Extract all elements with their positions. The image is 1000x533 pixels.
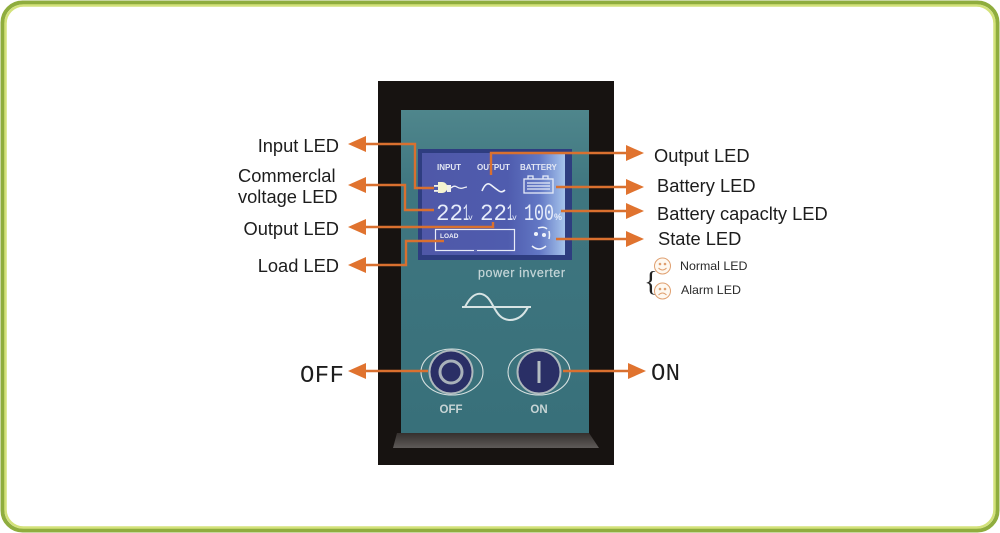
arrow: load LED [348, 241, 444, 273]
label: commercial voltage LED [238, 165, 338, 207]
label: state LED: State LED [658, 228, 741, 249]
OFF button [421, 349, 483, 416]
arrow: commercial voltage LED [348, 177, 434, 210]
icon: plug [434, 182, 467, 193]
arrow: OFF [348, 363, 428, 379]
bottom ledge [393, 433, 599, 448]
icon: sine wave logo [462, 294, 531, 320]
LCD display: v [468, 214, 473, 223]
LCD display [418, 149, 572, 260]
icon: battery [524, 176, 553, 193]
voltage and capacity readouts: 22 [436, 201, 463, 227]
label: OFF: OFF [300, 363, 344, 390]
legend: state faces [644, 258, 748, 299]
brace: { [644, 266, 658, 298]
label: commercial voltage LED: voltage LED [238, 186, 338, 207]
label: ON: ON [651, 361, 680, 388]
ON button: ON [530, 404, 548, 416]
right labels [651, 145, 828, 388]
label: battery LED: Battery LED [657, 175, 756, 196]
label: load LED: Load LED [258, 255, 339, 276]
LCD display: v [512, 214, 517, 223]
label: normal LED: Normal LED [680, 259, 748, 273]
brand text: power inverter [478, 266, 566, 280]
arrow: ON [563, 363, 646, 379]
teal faceplate [401, 110, 589, 433]
arrow: battery LED [556, 179, 644, 195]
label: battery capacity LED: Battery capaclty LED [657, 203, 828, 224]
label: alarm LED: Alarm LED [681, 283, 741, 297]
arrow: output voltage LED [348, 219, 493, 235]
LCD display: 22 [480, 201, 507, 227]
arrow: state LED [556, 231, 644, 247]
load bar: LOAD [440, 233, 459, 240]
arrow: input LED [348, 136, 434, 188]
label: input LED: Input LED [258, 135, 339, 156]
ON button [508, 349, 570, 416]
LCD display: 100 [524, 201, 554, 227]
LCD headings: INPUT [437, 163, 461, 172]
LCD display: OUTPUT [477, 163, 510, 172]
label: output LED left: Output LED [243, 218, 339, 239]
LCD display: 1 [507, 201, 513, 227]
left labels [238, 135, 344, 390]
label: output LED right: Output LED [654, 145, 750, 166]
load bar [436, 230, 514, 252]
LCD display: 1 [463, 201, 469, 227]
arrow: output LED [491, 145, 644, 175]
OFF button: OFF [440, 404, 462, 416]
LCD display: BATTERY [520, 163, 558, 172]
icon: smile face [654, 258, 670, 274]
black housing [378, 81, 614, 465]
icon: sad face [654, 283, 670, 299]
icon: state face [532, 227, 550, 249]
arrow: battery capacity LED [561, 203, 644, 219]
panel: inverter front [378, 81, 614, 465]
label: commercial voltage LED: Commerclal [238, 165, 336, 186]
icon: output sine wave [482, 184, 505, 192]
LCD display: % [554, 212, 562, 222]
